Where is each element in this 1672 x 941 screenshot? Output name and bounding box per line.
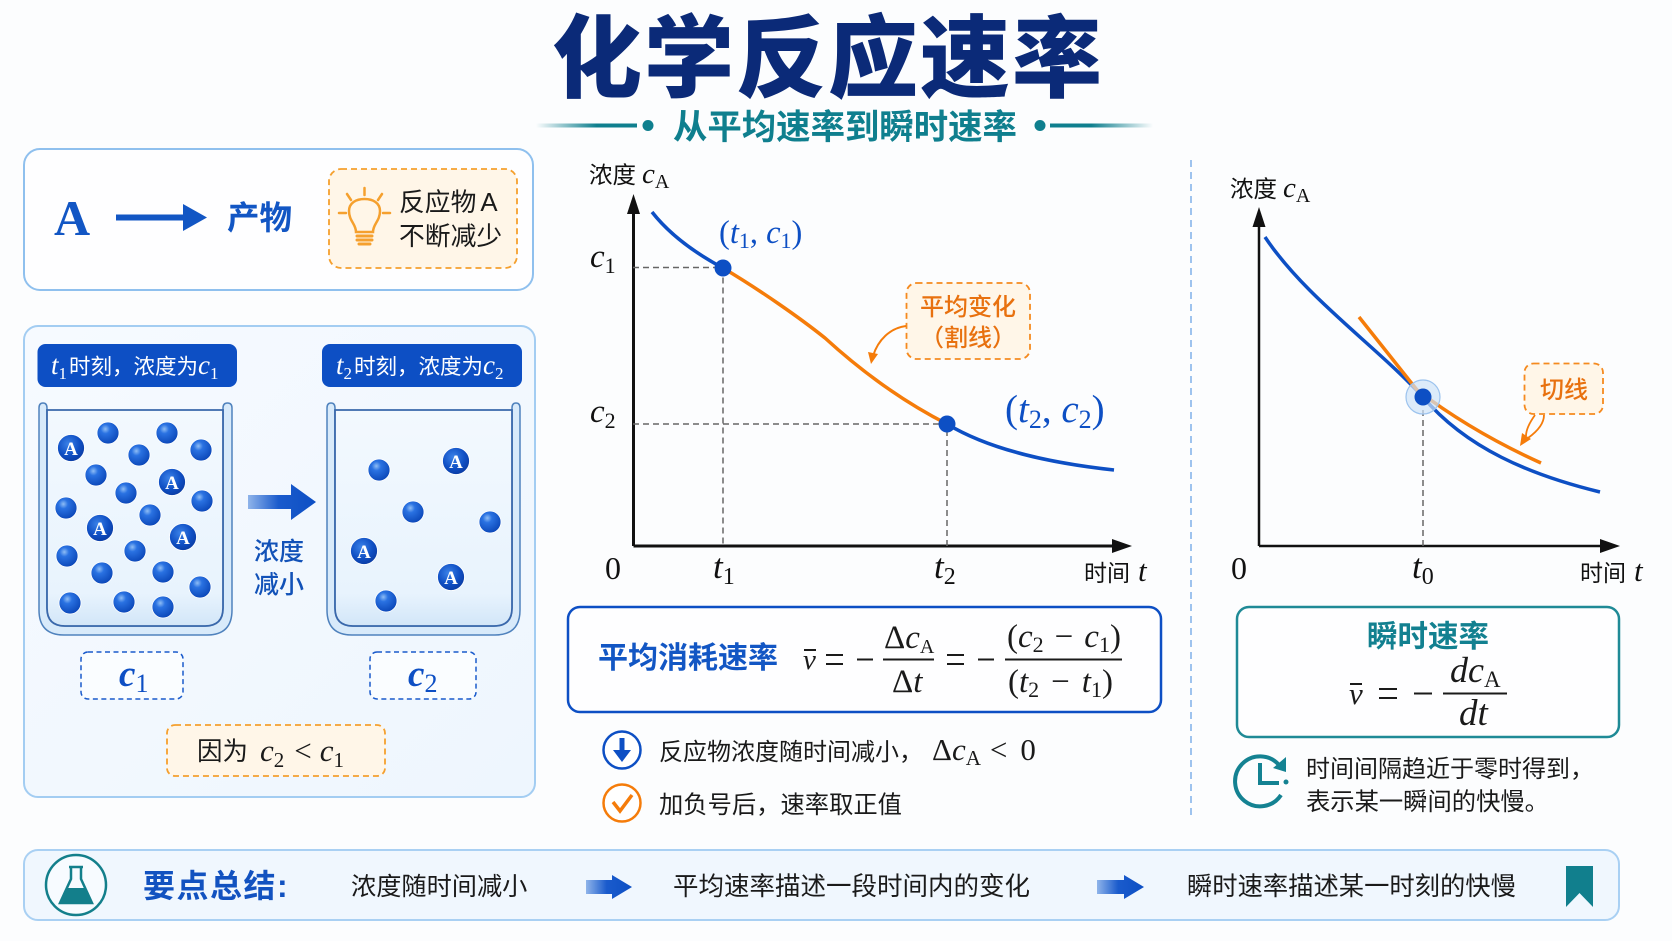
beaker: high concentration: A [64, 439, 78, 460]
arrow [1526, 415, 1544, 438]
callout: c2 less than c1: c [320, 733, 334, 768]
label: t1: t [51, 350, 60, 380]
tangent [1359, 317, 1541, 463]
note: concentration decreases: 0 [1020, 732, 1036, 767]
y axis label: 浓度c [1230, 172, 1296, 204]
label: t1 [38, 344, 237, 387]
formula panel: average rate [568, 607, 1161, 712]
beaker: low concentration [327, 403, 520, 635]
chart: average rate [589, 158, 1148, 590]
callout: c2 less than c1 [167, 725, 385, 776]
chart: average rate: ) [1092, 388, 1105, 431]
label: c1: c [119, 654, 135, 695]
formula: t [1082, 664, 1092, 700]
note: positive value [604, 784, 902, 822]
beaker: low concentration: A [449, 452, 463, 473]
label: concentration falls: 减小 [254, 571, 304, 599]
beaker: high concentration [39, 403, 232, 635]
formula: Δc [884, 620, 920, 656]
particles [55, 422, 213, 618]
chart: average rate: 2 [1079, 405, 1092, 434]
guide lines [633, 268, 947, 546]
heading: 要点总结: [143, 868, 289, 904]
label: t2: 时刻，浓度为 [354, 355, 483, 379]
note: instantaneous meaning: 时间间隔趋近于零时得到， [1306, 756, 1594, 783]
curve [652, 212, 1114, 470]
callout: secant: 平均变化 [920, 294, 1016, 321]
y axis label: A [1296, 185, 1311, 207]
point labels: (t [719, 215, 739, 251]
formula: A [1484, 667, 1501, 692]
tick labels: 0 [605, 550, 621, 586]
tick labels: 2 [605, 408, 616, 433]
tick labels: t [934, 547, 945, 586]
callout: reactant decreases: 不断减少 [399, 222, 502, 251]
panel: reaction [24, 149, 533, 290]
beaker: low concentration: A [444, 568, 458, 589]
label: c1 [81, 652, 183, 699]
label: c2 [370, 652, 476, 699]
step 3: 瞬时速率描述某一时刻的快慢 [1187, 873, 1516, 901]
chart: average rate: (t [1005, 388, 1029, 431]
beaker: high concentration: A [176, 528, 190, 549]
guide line [1422, 410, 1424, 546]
callout: tangent: 切线 [1540, 377, 1588, 404]
y axis label: A [655, 171, 670, 193]
label: t1: 1 [59, 364, 67, 383]
tick labels: 0 [1422, 564, 1434, 590]
callout: c2 less than c1: 1 [334, 748, 344, 772]
callout: c2 less than c1: 2 [274, 748, 284, 772]
callout: secant: （割线） [920, 325, 1016, 352]
beaker: high concentration: A [165, 473, 179, 494]
tick labels: 1 [723, 564, 735, 590]
formula: − [1051, 664, 1070, 700]
chart: average rate: 2 [1029, 405, 1042, 434]
y axis label: 浓度c [589, 158, 655, 190]
callout: c2 less than c1: < [294, 733, 312, 768]
note: concentration decreases: 反应物浓度随时间减小， [659, 739, 923, 766]
heading: 瞬时速率 [1367, 620, 1489, 654]
tick labels: t [1412, 547, 1423, 586]
chart: average rate: , [1042, 388, 1061, 431]
callout: c2 less than c1: c [260, 733, 274, 768]
formula: ) [1102, 664, 1113, 700]
label: t1: 1 [210, 364, 219, 383]
callout: c2 less than c1: 因为 [197, 738, 248, 766]
chart: average rate: c [1061, 388, 1079, 431]
point labels: c [766, 215, 781, 251]
x axis label: 时间 t [1084, 553, 1148, 588]
label: t1: c [198, 350, 210, 380]
label: t1: 时刻，浓度为 [69, 355, 198, 379]
formula: dc [1450, 650, 1484, 690]
divider [1190, 160, 1192, 818]
label: t2: 2 [495, 364, 504, 383]
reactant A: A [54, 190, 90, 246]
formula: 1 [1091, 677, 1102, 702]
arrow 2 [1097, 875, 1144, 899]
label: concentration falls: 浓度 [254, 538, 304, 566]
note: instantaneous meaning [1235, 756, 1594, 816]
formula: A [920, 636, 935, 658]
axes [634, 205, 1122, 546]
heading: 平均消耗速率 [598, 642, 778, 675]
beaker: low concentration: A [357, 542, 371, 563]
icon: down arrow [604, 732, 640, 768]
points [714, 260, 732, 276]
callout: tangent [1520, 364, 1603, 446]
label: t2: 2 [344, 364, 352, 383]
particles [368, 459, 501, 612]
subtitle: 从平均速率到瞬时速率 [673, 109, 1017, 147]
label: t2: c [483, 350, 495, 380]
tick labels: 1 [605, 253, 616, 278]
formula panel: instantaneous rate [1237, 607, 1619, 737]
point labels: , [750, 215, 766, 251]
tick labels: 2 [944, 564, 956, 590]
beaker: high concentration: A [93, 519, 107, 540]
note: concentration decreases [604, 732, 1036, 770]
tick labels: c [590, 239, 605, 275]
label: t2 [322, 344, 522, 387]
summary bar [24, 850, 1619, 920]
label: c2: 2 [424, 669, 437, 698]
icon: bookmark [1566, 866, 1593, 907]
point labels: ) [792, 215, 802, 251]
label: t2: t [336, 350, 345, 380]
formula: ) [1110, 619, 1121, 655]
label: c2: c [408, 654, 424, 695]
icon: flask [46, 855, 106, 915]
formula: c [1084, 619, 1099, 655]
callout: reactant decreases: 反应物A [399, 188, 498, 217]
formula: 2 [1028, 677, 1039, 702]
axes [1259, 218, 1610, 546]
tick labels: c [590, 394, 605, 430]
callout: secant [868, 283, 1030, 364]
formula: − [1055, 619, 1073, 655]
secant [723, 268, 947, 424]
point labels: 1 [781, 228, 792, 253]
note: instantaneous meaning: 表示某一瞬间的快慢。 [1306, 789, 1549, 816]
note: concentration decreases: A [966, 746, 982, 770]
icon: check [604, 784, 640, 822]
formula: 1 [1099, 632, 1110, 657]
arrow 1 [586, 875, 632, 899]
point labels: 1 [739, 228, 750, 253]
curve [1265, 237, 1600, 492]
formula: dt [1459, 693, 1490, 734]
arrow [873, 326, 906, 356]
step 1: 浓度随时间减小 [351, 873, 527, 901]
tick labels: 0 [1231, 550, 1247, 586]
subtitle [536, 109, 1153, 147]
formula: v [803, 644, 816, 676]
label: c1: 1 [135, 669, 148, 698]
arrow: concentration falls [248, 484, 316, 520]
title: 化学反应速率 [552, 10, 1104, 110]
formula [803, 619, 1122, 702]
label: concentration falls [254, 538, 304, 599]
step 2: 平均速率描述一段时间内的变化 [673, 873, 1030, 901]
formula [1349, 650, 1507, 734]
formula: (c [1007, 619, 1033, 655]
formula: v [1349, 676, 1363, 711]
point [1406, 380, 1440, 414]
tick labels [1231, 547, 1434, 590]
tick labels: t [713, 547, 724, 586]
note: concentration decreases: < [990, 732, 1007, 767]
x axis label: 时间 t [1580, 553, 1644, 588]
callout: reactant decreases [329, 169, 517, 268]
arrow: reaction direction [116, 204, 207, 231]
icon: clock [1235, 756, 1288, 806]
note: concentration decreases: Δc [932, 732, 966, 767]
formula: Δt [892, 664, 923, 700]
panel: beakers [24, 326, 535, 797]
formula: (t [1008, 664, 1028, 700]
chart: instantaneous rate [1230, 172, 1644, 590]
product label: 产物 [227, 200, 292, 236]
icon: light bulb [339, 188, 390, 244]
tick labels [590, 239, 956, 590]
formula: 2 [1033, 632, 1044, 657]
note: positive value: 加负号后，速率取正值 [659, 792, 902, 819]
